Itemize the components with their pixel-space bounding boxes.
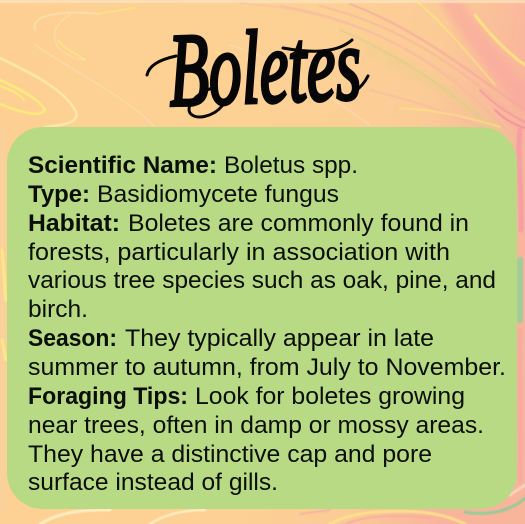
foraging tips: Look for boletes growing <box>195 383 465 410</box>
habitat: various tree species such as oak, pine, and <box>28 267 496 294</box>
habitat: Boletes are commonly found in <box>128 210 469 237</box>
habitat: birch. <box>28 296 88 323</box>
foraging tips: They have a distinctive cap and pore <box>28 441 432 468</box>
title: Boletes <box>167 7 363 128</box>
season: summer to autumn, from July to November. <box>28 354 506 381</box>
foraging tips: Foraging Tips: <box>28 383 188 410</box>
foraging tips: near trees, often in damp or mossy areas. <box>28 412 484 439</box>
type: Type: <box>28 181 90 208</box>
season <box>28 325 506 381</box>
season: Season: <box>28 325 117 352</box>
season: They typically appear in late <box>125 325 434 352</box>
foraging tips: surface instead of gills. <box>28 469 278 496</box>
scientific name: Boletus spp. <box>224 152 358 179</box>
habitat: forests, particularly in association with <box>28 239 450 266</box>
foraging tips <box>28 383 484 496</box>
habitat: Habitat: <box>28 210 120 237</box>
type: Basidiomycete fungus <box>97 181 339 208</box>
habitat <box>28 210 496 323</box>
scientific name: Scientific Name: <box>28 152 217 179</box>
panel: facts <box>7 127 517 509</box>
scientific name <box>28 152 358 179</box>
